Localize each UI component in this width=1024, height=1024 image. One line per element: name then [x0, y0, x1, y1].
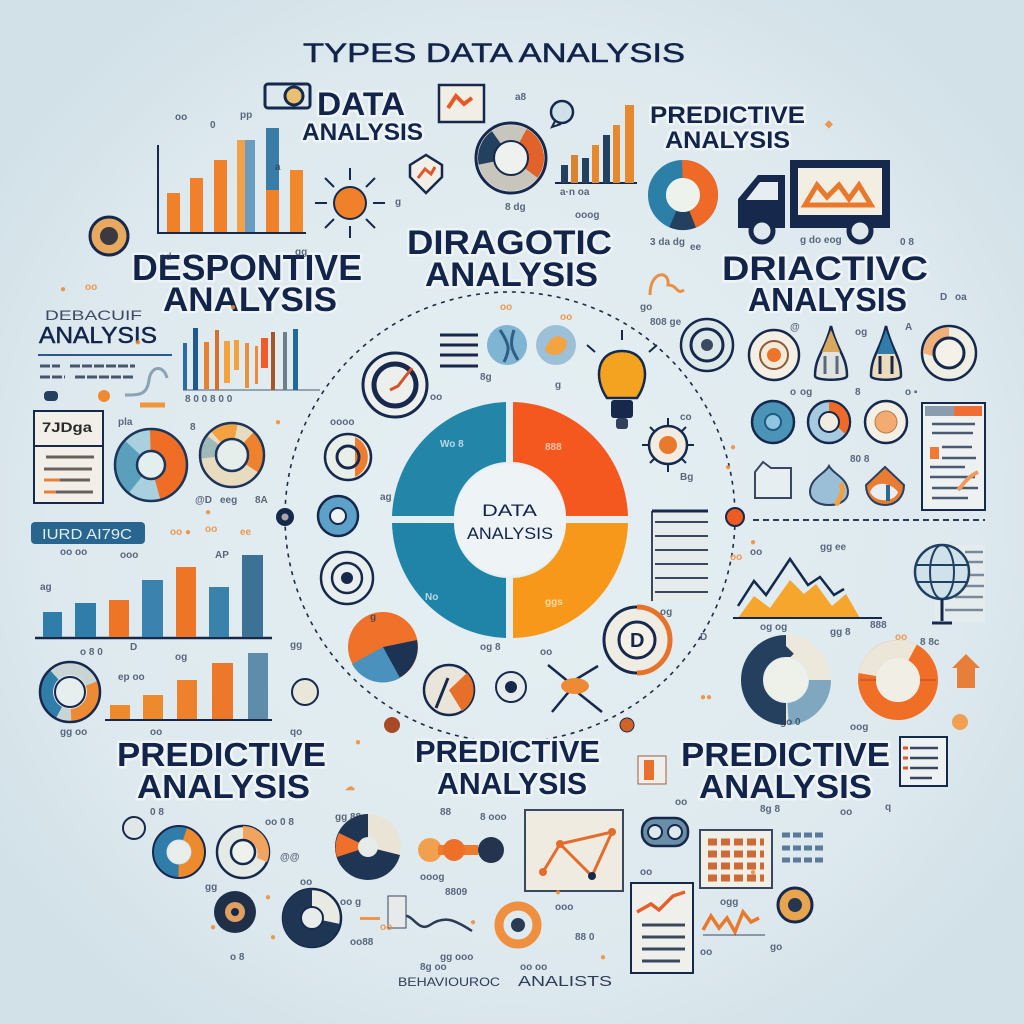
heading: predictive analysis bottom left: ANALYSIS: [137, 768, 310, 805]
heading: predictive analysis bottom right: PREDICTIVE: [681, 736, 890, 773]
text lines block left: [38, 355, 172, 405]
icon: orange ring: [749, 330, 799, 380]
small scattered labels: og: [855, 327, 867, 338]
central segmented donut: 888: [545, 442, 562, 453]
heading: despontive analysis: [132, 247, 362, 319]
icon: lightbulb: [587, 330, 657, 429]
small scattered labels: oo: [675, 797, 687, 808]
heading: predictive analysis bottom right: [681, 736, 890, 805]
icon: ring left: [90, 217, 128, 255]
small scattered labels: ag: [380, 492, 392, 503]
small scattered labels: gg ooo: [440, 952, 473, 963]
small scattered labels: oooo: [330, 417, 354, 428]
icon ring: [292, 679, 318, 705]
small scattered labels: ●: [750, 537, 756, 548]
small scattered labels: oo: [540, 647, 552, 658]
heading: predictive analysis bottom left: PREDICTIVE: [117, 736, 326, 773]
small scattered labels: pp: [240, 110, 252, 121]
icon: sun: [315, 168, 385, 238]
heading: data analysis: DATA: [317, 86, 405, 122]
small scattered labels: gg: [205, 882, 217, 893]
central segmented donut: ANALYSIS: [467, 524, 553, 543]
heading: diragotic analysis: ANALYSIS: [425, 256, 598, 294]
small scattered labels: 808 ge: [650, 317, 682, 328]
small scattered labels: og: [800, 387, 812, 398]
table lines center right: [650, 511, 708, 601]
donut: top center: [476, 123, 546, 193]
small scattered labels: ▬▬: [360, 912, 380, 923]
small scattered labels: oo 0 8: [265, 817, 294, 828]
icon: pill: [642, 818, 688, 846]
icon: blue droplet: [487, 325, 527, 365]
heading: driactivc analysis: [722, 250, 928, 318]
small scattered labels: o 8: [230, 952, 245, 963]
small scattered labels: D: [130, 642, 137, 653]
small scattered labels: 8 dg: [505, 202, 526, 213]
small scattered labels: 8: [855, 387, 861, 398]
small scattered labels: oo: [560, 312, 572, 323]
report with line chart: [631, 883, 693, 973]
small scattered labels: 8 0 0 8 0 0: [185, 394, 233, 405]
globe on stand: [915, 545, 985, 623]
small scattered labels: ●: [230, 302, 236, 313]
connector dots: [276, 508, 744, 733]
icon: camera: [265, 84, 310, 108]
small scattered labels: eeg: [220, 495, 237, 506]
small scattered labels: gg: [290, 640, 302, 651]
small scattered labels: ●: [60, 284, 66, 295]
small scattered labels: a: [275, 162, 281, 173]
heading: predictive analysis bottom center: ANALYSIS: [437, 766, 587, 801]
heading: small analysis left: DEBACUIF: [45, 307, 142, 323]
small scattered labels: og 8: [480, 642, 501, 653]
icon: half pie orange: [424, 665, 474, 715]
icon: target ring right: [681, 319, 733, 371]
small scattered labels: 8g 8: [760, 804, 780, 815]
small scattered labels: g do eog: [800, 235, 842, 246]
small scattered labels: oo: [300, 877, 312, 888]
donut ring bottom left: [217, 826, 269, 878]
small scattered labels: o 8 0: [80, 647, 103, 658]
small scattered labels: go 0: [780, 717, 801, 728]
heading: diragotic analysis: [407, 224, 612, 294]
small scattered labels: oo: [895, 632, 907, 643]
heading: predictive analysis bottom right: ANALYSIS: [699, 768, 872, 805]
heading: data analysis: [302, 86, 423, 146]
icon: eye dot: [496, 672, 526, 702]
small scattered labels: ●: [600, 952, 606, 963]
small scattered labels: pla: [118, 417, 133, 428]
bar chart: top left: [158, 128, 306, 233]
icon: split drop orange: [866, 467, 904, 505]
small scattered labels: g: [370, 612, 376, 623]
small scattered labels: oog: [850, 722, 868, 733]
dashed divider right: [753, 519, 985, 521]
small scattered labels: 0 8: [900, 237, 914, 248]
small scattered labels: 3 da dg: [650, 237, 685, 248]
small scattered labels: 8g: [480, 372, 492, 383]
icon: picture frame: [439, 85, 484, 122]
banner label: IURD AI79C: [42, 526, 132, 543]
small scattered labels: oo: [85, 282, 97, 293]
small scattered labels: ●: [555, 887, 561, 898]
small scattered labels: oo ●: [170, 527, 191, 538]
small scattered labels: 80 8: [850, 454, 870, 465]
small scattered labels: ●: [615, 127, 621, 138]
network chart card: [525, 810, 623, 891]
small scattered labels: ●: [270, 932, 276, 943]
small scattered labels: 888: [870, 620, 887, 631]
small scattered labels: og: [660, 607, 672, 618]
heat table: [700, 830, 772, 888]
small scattered labels: og: [175, 652, 187, 663]
footer label: ANALISTS: [518, 973, 612, 990]
small scattered labels: 0: [210, 120, 216, 131]
pie chart: [348, 612, 418, 682]
icon: dark dial: [214, 891, 256, 933]
small scattered labels: ed: [160, 252, 172, 263]
small scattered labels: ●: [135, 337, 141, 348]
small scattered labels: q: [885, 802, 891, 813]
donut: left orange blue: [114, 428, 188, 502]
icon: scribble: [650, 275, 684, 295]
small scattered labels: D: [700, 632, 707, 643]
heading: driactivc analysis: ANALYSIS: [748, 281, 907, 318]
small scattered labels: gg 88: [335, 812, 362, 823]
donut: left segmented: [198, 421, 266, 489]
heading: predictive analysis top right: PREDICTIVE: [650, 102, 805, 129]
small scattered labels: oo: [150, 727, 162, 738]
small scattered labels: oo: [730, 552, 742, 563]
icon: left rings: [325, 434, 371, 480]
small scattered labels: gg oo: [60, 727, 87, 738]
small scattered labels: 8g oo: [420, 962, 447, 973]
heading: despontive analysis: ANALYSIS: [163, 281, 337, 319]
central segmented donut: Wo 8: [440, 439, 464, 450]
icon: network spider: [548, 665, 602, 712]
heading: small analysis left: [39, 307, 157, 348]
small scattered labels: oo oo: [60, 547, 87, 558]
small scattered labels: ●: [470, 917, 476, 928]
icon: target with check: [363, 353, 427, 417]
icon: cone tan: [815, 326, 847, 380]
small scattered labels: oa: [955, 292, 967, 303]
small scattered labels: 8 ooo: [480, 812, 507, 823]
small scattered labels: ●: [265, 892, 271, 903]
dial bottom right: [778, 888, 812, 922]
bar chart: top right: [555, 105, 637, 183]
small scattered labels: @D: [195, 495, 212, 506]
title: TYPES DATA ANALYSIS: [303, 38, 685, 68]
orange ring bottom: [499, 906, 537, 944]
donut pair bottom left: [153, 826, 205, 878]
mountain area chart: [733, 559, 882, 618]
small scattered labels: ◆: [824, 119, 833, 130]
small scattered labels: go: [640, 302, 652, 313]
small scattered labels: co: [680, 412, 692, 423]
small scattered labels: og og: [760, 622, 787, 633]
small scattered labels: oo: [430, 392, 442, 403]
small scattered labels: a8: [515, 92, 527, 103]
center label: DATA: [482, 501, 538, 520]
small scattered labels: ee: [240, 527, 252, 538]
central segmented donut: ggs: [545, 597, 563, 608]
icon: folder: [755, 462, 791, 498]
small scattered labels: ●: [210, 922, 216, 933]
icon: cone blue: [871, 326, 901, 380]
icon: blue ring row: [752, 401, 794, 443]
chart tag: [638, 756, 666, 784]
heading: small analysis left: ANALYSIS: [39, 322, 157, 348]
small scattered labels: Bg: [680, 472, 693, 483]
heading: predictive analysis bottom center: PREDICTIVE: [415, 734, 600, 769]
small scattered labels: 8: [190, 422, 196, 433]
small scattered labels: gg ee: [820, 542, 847, 553]
small scattered labels: ag: [40, 582, 52, 593]
small scattered labels: ooog: [420, 872, 444, 883]
small scattered labels: oo: [205, 524, 217, 535]
table card left: [34, 411, 103, 503]
dial: lower right inner: D: [630, 630, 644, 652]
small scattered labels: a·n oa: [560, 187, 590, 198]
small scattered labels: ●: [275, 417, 281, 428]
banner label: [31, 522, 145, 544]
small scattered labels: ●: [750, 867, 756, 878]
report document right: [922, 403, 985, 510]
donut: orange large: [860, 644, 936, 716]
icon: shield: [410, 155, 442, 193]
small scattered labels: ooo: [120, 550, 138, 561]
icon: lettered dial: [321, 552, 373, 604]
small scattered labels: D: [940, 292, 947, 303]
small scattered labels: o ▪: [905, 387, 918, 398]
icon: ring small: [123, 817, 145, 839]
small scattered labels: gg: [295, 247, 307, 258]
dashed circle connecting central ring: [285, 292, 735, 742]
icon: big ring right: [922, 326, 976, 380]
icon: gear with rays: [642, 418, 694, 472]
donut: lower left: [39, 661, 101, 723]
small scattered labels: @: [790, 322, 800, 333]
icon: delivery truck: [738, 160, 890, 242]
zigzag line chart: [703, 912, 765, 935]
small scattered labels: oo88: [350, 937, 374, 948]
heading: predictive analysis bottom center: [415, 734, 600, 801]
small scattered labels: ●: [730, 442, 736, 453]
footer label: BEHAVIOUROC: [398, 975, 500, 989]
small scattered labels: g: [555, 380, 561, 391]
small scattered labels: @@: [280, 852, 300, 863]
small scattered labels: AP: [215, 550, 229, 561]
small scattered labels: 8809: [445, 887, 468, 898]
icon: dumbbell connector: [418, 837, 504, 863]
small scattered labels: oo: [380, 922, 392, 933]
bar chart: mid left: [35, 555, 272, 638]
small scattered labels: oo: [640, 867, 652, 878]
small scattered labels: ●: [205, 507, 211, 518]
small scattered labels: ●: [355, 737, 361, 748]
icon: orange blue donut: [808, 401, 850, 443]
small scattered labels: g: [395, 197, 401, 208]
small scattered labels: oo: [500, 302, 512, 313]
icon: peach ring: [865, 401, 907, 443]
small table right: [782, 835, 824, 860]
small scattered labels: oo g: [340, 897, 361, 908]
heading: predictive analysis bottom left: [117, 736, 326, 805]
small scattered labels: oo: [750, 547, 762, 558]
bar chart: left vertical stripes: [183, 328, 320, 390]
heading: data analysis: ANALYSIS: [302, 119, 423, 146]
small scattered labels: ogg: [720, 897, 738, 908]
donut dark bottom: [283, 889, 341, 947]
small scattered labels: 8 8c: [920, 637, 940, 648]
small scattered labels: gg 8: [830, 627, 851, 638]
icon: blue ring: [318, 496, 358, 536]
donut: navy large: [752, 646, 820, 714]
small scattered labels: 88: [440, 807, 452, 818]
icon: orange house: [952, 654, 980, 730]
small scattered labels: 88 0: [575, 932, 595, 943]
small scattered labels: ooog: [575, 210, 599, 221]
pie bottom center: [335, 814, 401, 880]
small scattered labels: [40, 92, 967, 973]
small scattered labels: ●●: [700, 692, 712, 703]
clipboard: [900, 737, 947, 786]
central segmented donut: [392, 402, 628, 638]
heading: despontive analysis: DESPONTIVE: [132, 247, 362, 288]
heading: driactivc analysis: DRIACTIVC: [722, 250, 928, 288]
small scattered labels: ep oo: [118, 672, 145, 683]
footer label: [398, 973, 612, 990]
small scattered labels: qo: [290, 727, 302, 738]
central segmented donut: No: [425, 592, 438, 603]
small scattered labels: ooo: [555, 902, 573, 913]
small scattered labels: 0 8: [150, 807, 164, 818]
small scattered labels: 8A: [255, 495, 268, 506]
heading: diragotic analysis: DIRAGOTIC: [407, 224, 612, 262]
small scattered labels: ☁: [345, 782, 355, 793]
small scattered labels: oo: [700, 947, 712, 958]
icon: list table: [440, 333, 478, 368]
icon: orange droplet: [536, 325, 576, 365]
bar chart: lower left: [105, 653, 272, 720]
heading: predictive analysis top right: [650, 102, 805, 154]
icon: speech bubble: [551, 101, 573, 127]
small scattered labels: oo: [175, 112, 187, 123]
heading: predictive analysis top right: ANALYSIS: [665, 127, 790, 154]
wave line chart: [388, 896, 472, 931]
small scattered labels: A: [905, 322, 912, 333]
small scattered labels: oo: [840, 807, 852, 818]
icon: split drop blue: [810, 466, 848, 505]
small scattered labels: oo oo: [520, 962, 547, 973]
donut: top right: [650, 162, 716, 228]
small scattered labels: o: [790, 387, 796, 398]
small scattered labels: ee: [690, 242, 702, 253]
small scattered labels: go: [770, 942, 782, 953]
table card left: 7JDga: [42, 419, 92, 435]
small scattered labels: ●: [725, 462, 731, 473]
dial: lower right inner: [604, 607, 670, 673]
